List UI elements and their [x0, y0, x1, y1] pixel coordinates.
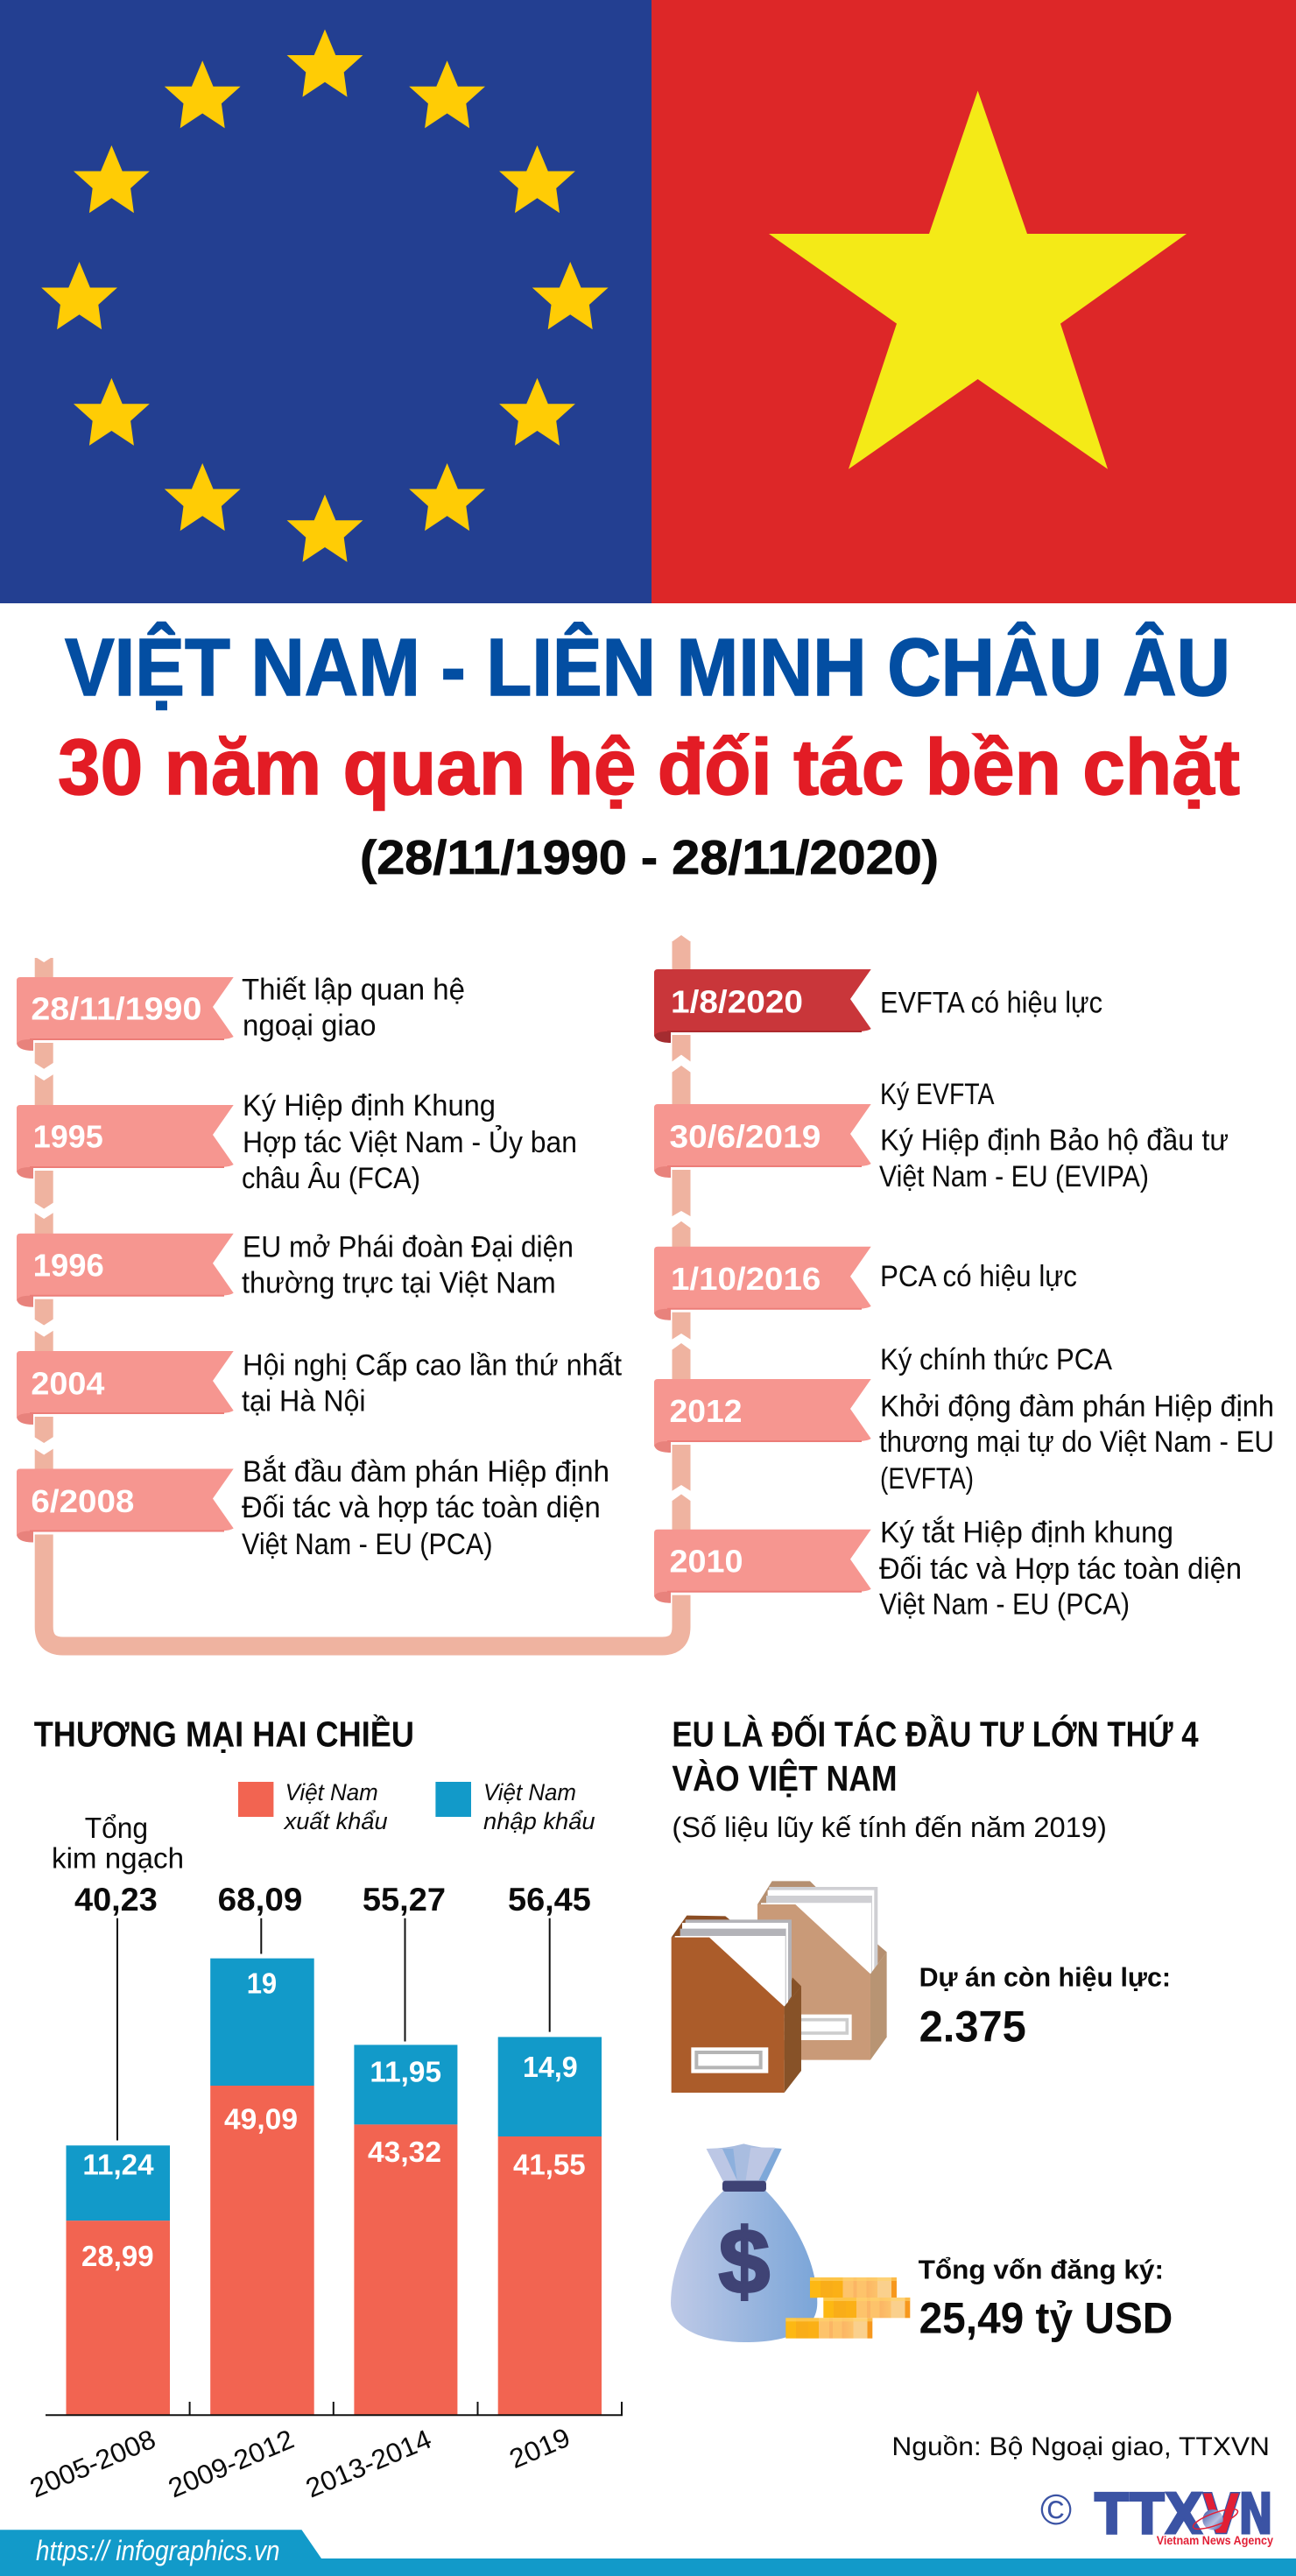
axis labels: 2019: [505, 2422, 574, 2474]
timeline item: 1/8/2020: [654, 969, 1102, 1043]
total turnover label: Tổng: [85, 1812, 148, 1844]
stat: active projects: Dự án còn hiệu lực:: [919, 1961, 1171, 1992]
total turnover label: kim ngạch: [52, 1841, 184, 1874]
legend: exports: xuất khẩu: [283, 1808, 388, 1834]
timeline item: 1995: châu Âu (FCA): [242, 1162, 420, 1195]
source: Nguồn: Bộ Ngoại giao, TTXVN: [891, 2432, 1270, 2461]
timeline item: 1996: 1996: [33, 1247, 104, 1283]
icon: money bag and coins: [671, 2143, 910, 2342]
heading: two-way trade: THƯƠNG MẠI HAI CHIỀU: [34, 1714, 414, 1755]
timeline item: 1/10/2016: 1/10/2016: [671, 1261, 821, 1297]
timeline item: 2004: [17, 1348, 623, 1425]
timeline item: 6/2008: Bắt đầu đàm phán Hiệp định: [243, 1455, 609, 1489]
footer band: [0, 2530, 1296, 2576]
timeline item: 2012: Ký chính thức PCA: [880, 1343, 1112, 1376]
icon: folders: [672, 1881, 887, 2093]
heading: EU is the 4th largest investor: EU LÀ ĐỐI TÁC ĐẦU TƯ LỚN THỨ 4: [672, 1714, 1199, 1755]
panel: EU flag: [0, 0, 652, 603]
timeline item: 2012: (EVFTA): [880, 1462, 974, 1496]
timeline item: 2010: 2010: [669, 1543, 743, 1579]
timeline item: 2004: Hội nghị Cấp cao lần thứ nhất: [243, 1348, 623, 1382]
timeline item: 30/6/2019: Ký Hiệp định Bảo hộ đầu tư: [880, 1123, 1229, 1157]
heading: EU is the 4th largest investor: [672, 1714, 1199, 1798]
icon: money bag and coins: $: [719, 2211, 770, 2313]
logo: TTXVN: V: [1202, 2482, 1240, 2547]
total turnover label: [52, 1812, 184, 1874]
timeline item: 1995: Hợp tác Việt Nam - Ủy ban: [243, 1126, 577, 1159]
timeline item: 6/2008: 6/2008: [31, 1483, 134, 1519]
legend: exports: Việt Nam: [285, 1779, 378, 1805]
timeline item: 1/8/2020: EVFTA có hiệu lực: [880, 986, 1102, 1019]
legend: imports: nhập khẩu: [483, 1808, 595, 1834]
bar: 2005-2008: 40,23: [74, 1882, 158, 1918]
heading: EU is the 4th largest investor: VÀO VIỆT NAM: [672, 1758, 898, 1798]
logo: TTXVN: [1095, 2482, 1273, 2547]
axis labels: 2009-2012: [164, 2424, 299, 2503]
legend: imports: [435, 1779, 595, 1834]
bar: 2013-2014: 55,27: [363, 1882, 446, 1918]
timeline item: 28/11/1990: [17, 973, 465, 1051]
chart axis: [46, 2402, 623, 2415]
title: (28/11/1990 - 28/11/2020): [360, 830, 939, 884]
icon: copyright: ©: [1040, 2487, 1072, 2534]
timeline item: 30/6/2019: [654, 1078, 1229, 1193]
timeline item: 1996: thường trực tại Việt Nam: [242, 1267, 556, 1300]
timeline item: 2010: Việt Nam - EU (PCA): [879, 1588, 1130, 1622]
timeline item: 1/10/2016: [654, 1247, 1077, 1320]
timeline item: 2012: [654, 1343, 1274, 1496]
timeline item: 30/6/2019: Việt Nam - EU (EVIPA): [879, 1160, 1149, 1193]
bar: 2013-2014: 43,32: [368, 2136, 441, 2168]
timeline item: 2012: thương mại tự do Việt Nam - EU: [879, 1425, 1274, 1459]
timeline item: 2012: Khởi động đàm phán Hiệp định: [880, 1390, 1274, 1424]
legend: exports: [238, 1779, 388, 1834]
axis labels: 2005-2008: [25, 2424, 160, 2503]
title: [58, 622, 1240, 884]
bar: 2005-2008: [67, 1882, 170, 2415]
bar: 2019: 56,45: [508, 1882, 591, 1918]
bar: 2005-2008: 28,99: [81, 2240, 154, 2272]
stat: total registered capital: 25,49 tỷ USD: [919, 2294, 1173, 2343]
timeline item: 6/2008: [17, 1455, 609, 1561]
panel: EU investment: [671, 1714, 1199, 2343]
logo: TTXVN: TTX: [1095, 2482, 1203, 2547]
timeline item: 1996: [17, 1231, 574, 1307]
timeline item: 30/6/2019: 30/6/2019: [669, 1119, 821, 1155]
timeline item: 6/2008: Đối tác và hợp tác toàn diện: [242, 1491, 601, 1524]
legend: imports: Việt Nam: [483, 1779, 576, 1805]
footer band: https:// infographics.vn: [36, 2535, 280, 2566]
logo: TTXVN: Vietnam News Agency: [1157, 2533, 1273, 2547]
subheading: cumulative to 2019: (Số liệu lũy kế tính đến năm 2019): [672, 1812, 1107, 1843]
bar: 2009-2012: 68,09: [218, 1882, 302, 1918]
timeline item: 1/10/2016: PCA có hiệu lực: [880, 1260, 1077, 1293]
timeline item: 6/2008: Việt Nam - EU (PCA): [242, 1528, 492, 1561]
timeline item: 1/8/2020: 1/8/2020: [671, 983, 803, 1019]
timeline connector line: [34, 935, 691, 1646]
timeline item: 1995: [17, 1089, 577, 1195]
bar: 2019: 41,55: [513, 2148, 586, 2180]
stat: total registered capital: [919, 2255, 1173, 2343]
bar: 2019: 14,9: [523, 2051, 578, 2083]
timeline item: 1995: 1995: [33, 1119, 103, 1155]
timeline item: 28/11/1990: 28/11/1990: [31, 990, 201, 1026]
timeline item: 28/11/1990: Thiết lập quan hệ: [242, 973, 465, 1006]
timeline item: 1995: Ký Hiệp định Khung: [243, 1089, 496, 1123]
stat: active projects: 2.375: [919, 2002, 1026, 2051]
timeline item: 30/6/2019: Ký EVFTA: [880, 1078, 995, 1111]
timeline item: 2004: tại Hà Nội: [242, 1385, 366, 1418]
bar: 2013-2014: [354, 1882, 457, 2415]
timeline item: 1996: EU mở Phái đoàn Đại diện: [243, 1231, 574, 1264]
panel: Vietnam flag: [652, 0, 1296, 603]
title: 30 năm quan hệ đối tác bền chặt: [58, 724, 1240, 812]
logo: TTXVN: N: [1238, 2482, 1273, 2547]
axis labels: 2013-2014: [301, 2424, 436, 2503]
timeline item: 2010: Đối tác và Hợp tác toàn diện: [879, 1552, 1242, 1586]
stat: total registered capital: Tổng vốn đăng ký:: [919, 2255, 1164, 2285]
bar: 2019: [498, 1882, 602, 2415]
panel: timeline: [17, 935, 1274, 1646]
timeline item: 2004: 2004: [31, 1365, 104, 1401]
bar: 2005-2008: 11,24: [82, 2148, 154, 2180]
panel: two-way trade chart: [25, 1714, 623, 2503]
bar: 2009-2012: 19: [247, 1967, 277, 2000]
bar: 2009-2012: 49,09: [224, 2103, 298, 2136]
bar: 2013-2014: 11,95: [370, 2055, 441, 2087]
timeline item: 2012: 2012: [669, 1393, 743, 1429]
timeline item: 2010: Ký tắt Hiệp định khung: [880, 1517, 1173, 1550]
bar: 2009-2012: [210, 1882, 314, 2415]
axis labels: [25, 2422, 574, 2503]
timeline item: 28/11/1990: ngoại giao: [243, 1010, 377, 1043]
timeline item: 2010: [654, 1517, 1242, 1622]
stat: active projects: [919, 1961, 1171, 2051]
